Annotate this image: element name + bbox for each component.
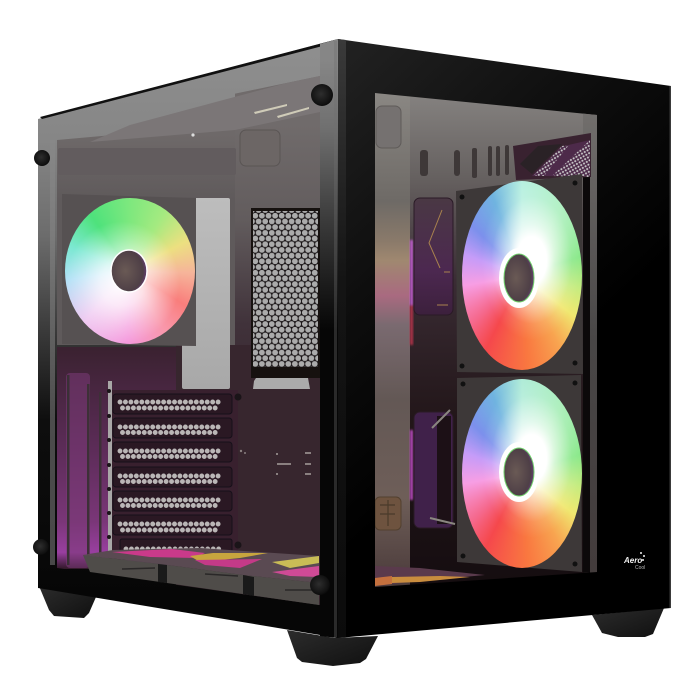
bottom fan hub — [504, 448, 534, 496]
rear badge — [376, 106, 401, 148]
top fan glow — [462, 181, 582, 370]
left foot — [39, 586, 96, 618]
top fan hub ring — [499, 248, 539, 308]
lower black strip — [320, 330, 338, 638]
front window — [375, 90, 600, 590]
bolts — [33, 84, 333, 595]
logo: Aero Cool: Cool — [635, 565, 645, 571]
pcie vent dots — [120, 402, 222, 549]
side fan — [65, 198, 195, 344]
bolt top right — [311, 84, 333, 106]
left light bar — [50, 140, 55, 565]
thin right edge — [334, 41, 337, 637]
top fan frame — [456, 174, 583, 374]
white bracket — [182, 198, 230, 389]
top fan — [462, 181, 582, 370]
side fan glow — [65, 198, 195, 344]
right foot — [592, 608, 664, 637]
pcie slot covers — [113, 394, 232, 556]
front body — [338, 39, 671, 638]
back wall — [235, 76, 320, 606]
panel: side glass — [38, 39, 338, 638]
bolt bottom left — [33, 539, 49, 555]
power connector — [375, 497, 401, 530]
right edge highlight — [670, 86, 671, 608]
fan front slits — [122, 568, 319, 590]
upper shelf — [58, 148, 236, 168]
interior — [57, 74, 320, 606]
window left column — [375, 90, 410, 590]
feet — [39, 586, 664, 666]
pcie backing plate — [110, 390, 176, 560]
bottom fan frame — [457, 375, 582, 572]
top mesh panel — [90, 74, 320, 142]
gpu bracket lower — [414, 410, 455, 528]
bottom fan glow — [462, 379, 582, 568]
top fan hub — [504, 254, 534, 302]
magenta light — [410, 240, 413, 500]
side frame — [38, 39, 338, 638]
window interior — [410, 90, 600, 590]
center foot — [287, 630, 378, 666]
panel: front face — [338, 39, 671, 638]
bolt top left — [34, 150, 50, 166]
bottom fan — [462, 379, 582, 568]
top mesh — [513, 133, 591, 180]
fan fronts — [83, 555, 319, 605]
lower slot — [253, 378, 310, 389]
logo: Aero Cool — [623, 552, 645, 571]
gpu bracket upper — [414, 198, 453, 315]
rear exhaust badge — [240, 130, 280, 166]
logo: Aero Cool: Aero — [623, 556, 642, 565]
right side strip — [320, 39, 338, 340]
wall marks — [240, 450, 311, 475]
bottom fan hub ring — [499, 442, 539, 502]
corner pillar — [338, 39, 346, 638]
expansion bracket — [66, 373, 112, 568]
top edge line — [40, 39, 338, 119]
vent slots — [420, 145, 509, 178]
fan tops — [83, 548, 319, 583]
inner back panel — [57, 124, 235, 345]
mesh panel — [251, 208, 320, 378]
tray lower panel — [57, 347, 176, 569]
window right strip — [583, 110, 597, 575]
top highlights — [191, 104, 309, 137]
lower back plate — [176, 345, 320, 605]
bolt bottom right — [310, 575, 330, 595]
side fan frame — [62, 194, 196, 346]
side fan hub — [111, 250, 147, 292]
slot screws — [107, 389, 242, 548]
floor reflections — [375, 566, 485, 586]
bottom fans — [83, 548, 319, 605]
